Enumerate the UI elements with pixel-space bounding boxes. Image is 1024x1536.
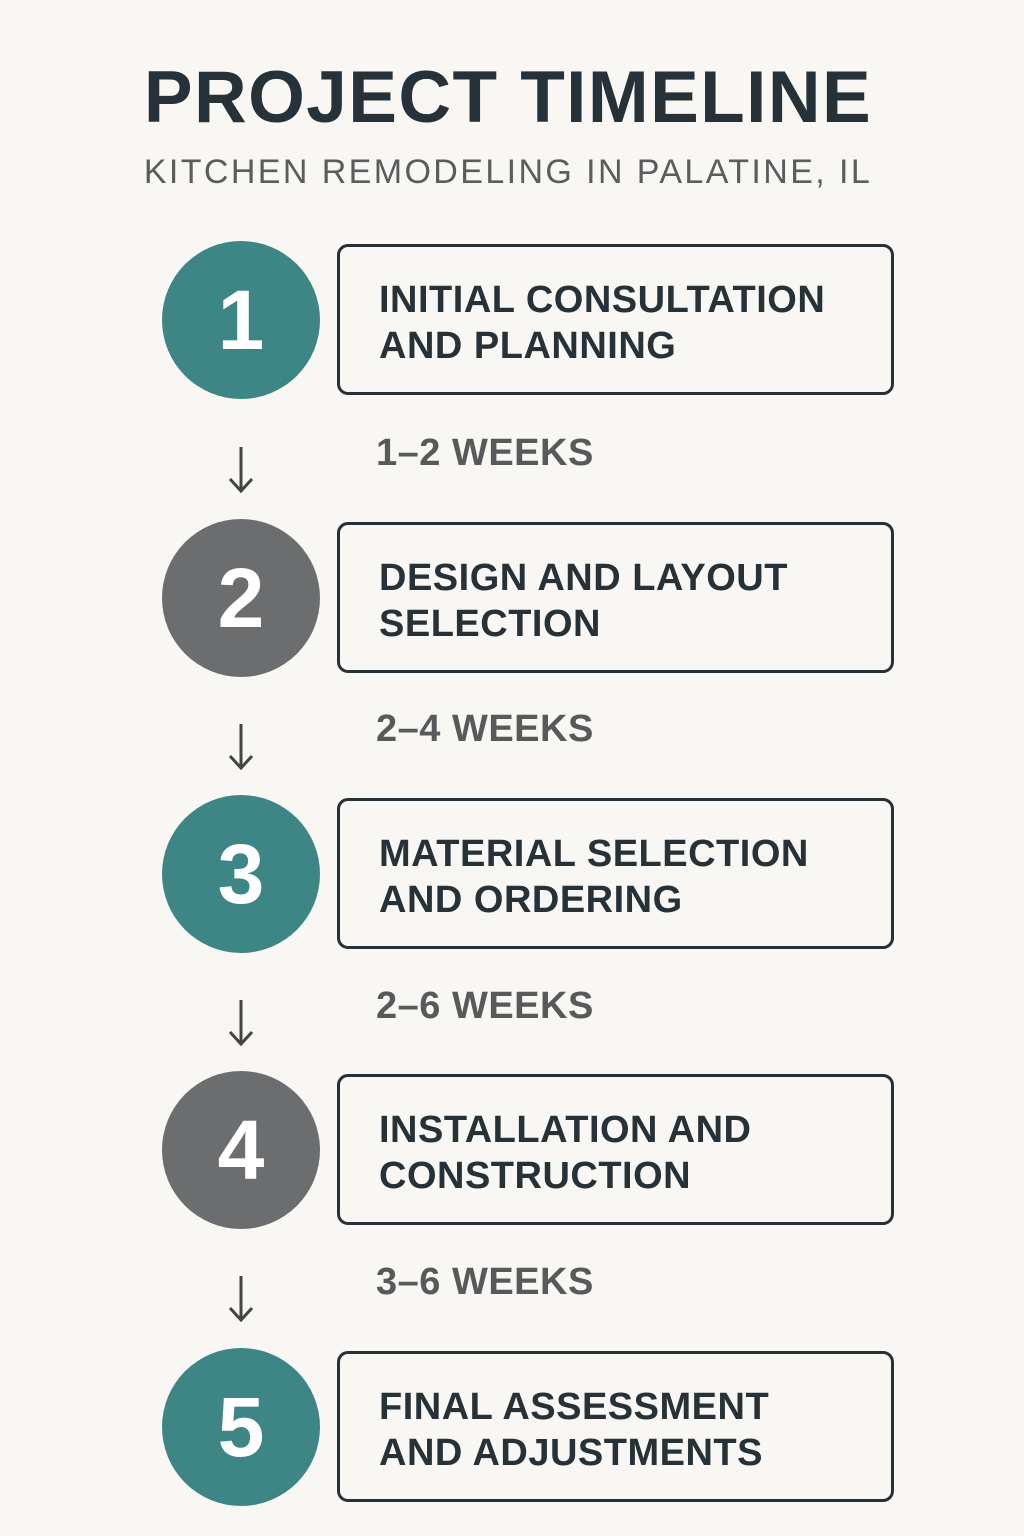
- arrow 3: [229, 1000, 253, 1046]
- step 5 box: FINAL ASSESSMENT: [379, 1386, 769, 1428]
- step 4 box: INSTALLATION AND: [379, 1109, 751, 1151]
- duration 1: 1–2 WEEKS: [376, 432, 594, 474]
- step 3 box: AND ORDERING: [379, 879, 683, 921]
- title: PROJECT TIMELINE: [144, 57, 872, 138]
- step 2 box: DESIGN AND LAYOUT: [379, 557, 788, 599]
- step 5 circle: [162, 1348, 320, 1506]
- step 1 circle: [162, 241, 320, 399]
- step 2 box: [337, 522, 894, 673]
- step 3 circle: 3: [218, 827, 264, 921]
- step 4 circle: 4: [218, 1103, 264, 1197]
- arrow 1: [229, 447, 253, 494]
- step 1 circle: 1: [218, 273, 264, 367]
- step 1 box: INITIAL CONSULTATION: [379, 279, 825, 321]
- step 5 box: [337, 1351, 894, 1502]
- step 2 box: SELECTION: [379, 603, 601, 645]
- step 3 box: MATERIAL SELECTION: [379, 833, 809, 875]
- step 3 circle: [162, 795, 320, 953]
- step 3 box: [337, 798, 894, 949]
- step 4 box: [337, 1074, 894, 1225]
- step 4 circle: [162, 1071, 320, 1229]
- subtitle: KITCHEN REMODELING IN PALATINE, IL: [144, 153, 872, 191]
- duration 3: 2–6 WEEKS: [376, 985, 594, 1027]
- duration 4: 3–6 WEEKS: [376, 1261, 594, 1303]
- step 2 circle: 2: [218, 551, 264, 645]
- arrow 2: [229, 724, 253, 770]
- step 2 circle: [162, 519, 320, 677]
- step 4 box: CONSTRUCTION: [379, 1155, 691, 1197]
- step 1 box: [337, 244, 894, 395]
- arrow 4: [229, 1276, 253, 1322]
- step 5 circle: 5: [218, 1380, 264, 1474]
- duration 2: 2–4 WEEKS: [376, 708, 594, 750]
- step 5 box: AND ADJUSTMENTS: [379, 1432, 763, 1474]
- step 1 box: AND PLANNING: [379, 325, 676, 367]
